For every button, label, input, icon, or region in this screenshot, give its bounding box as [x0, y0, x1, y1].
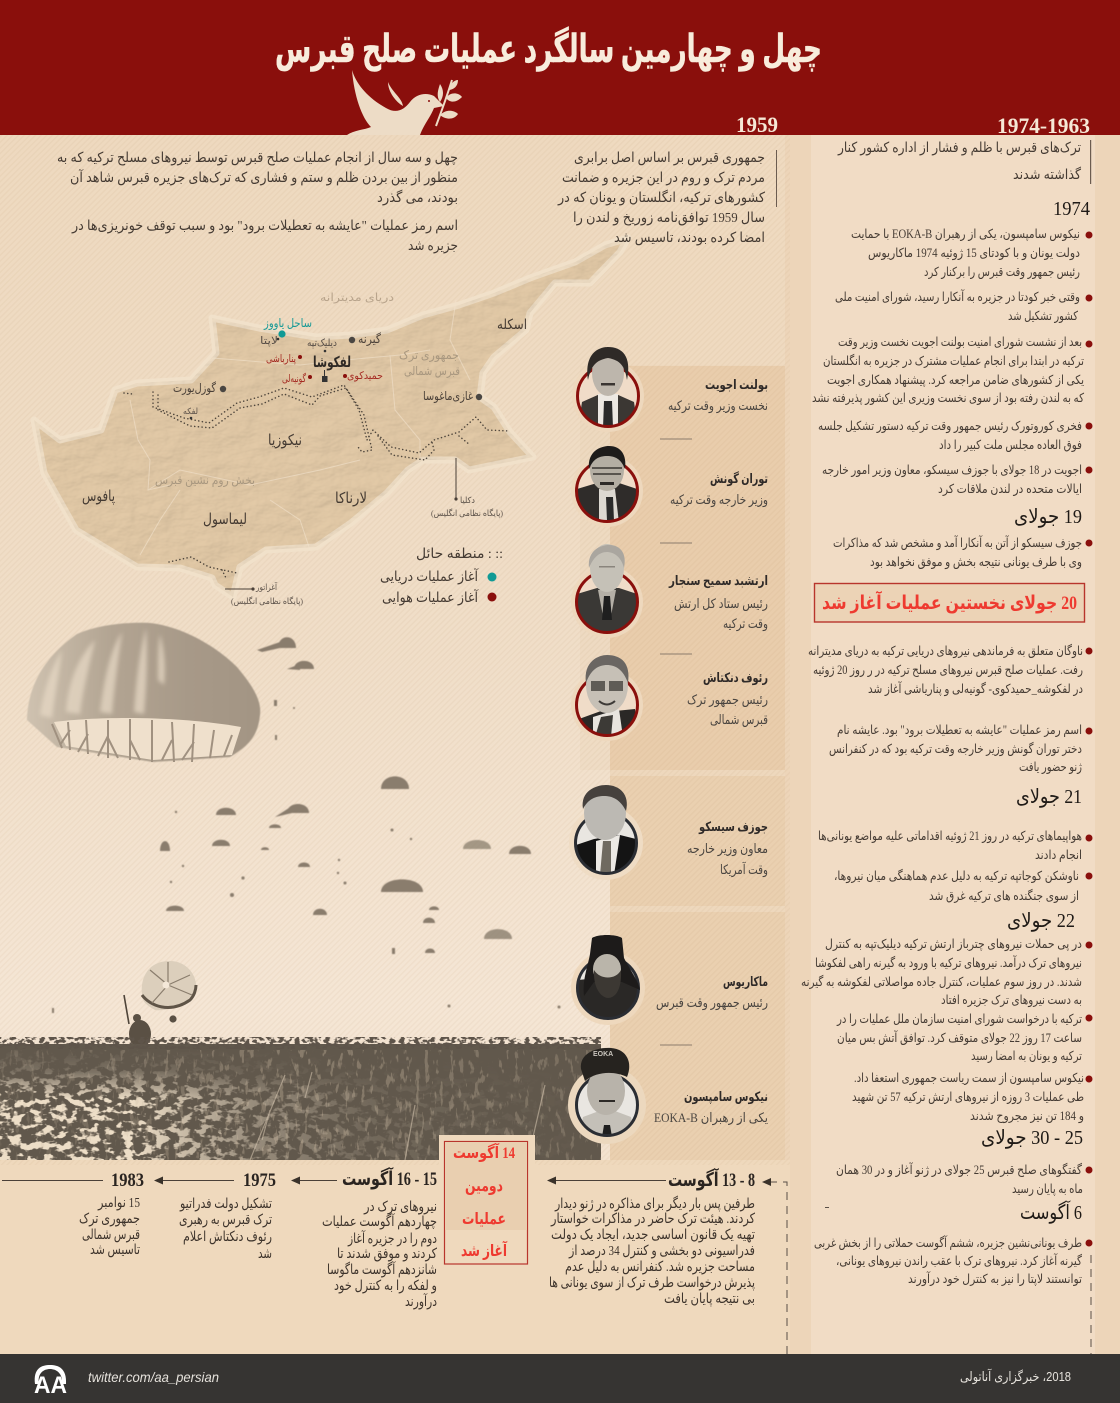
- portrait: Semih Sancar: [571, 544, 643, 638]
- icon: dove with olive branch: [347, 70, 462, 135]
- timeline block 22 July: [801, 937, 1092, 1124]
- timeline: 1983: 1983: [111, 1170, 144, 1191]
- small parachute with soldier: [124, 961, 196, 1048]
- timeline block 25-30 July: گفتگوهای صلح قبرس 25 جولای در ژنو آغاز و در 30 همان: [836, 1162, 1082, 1178]
- map labels: گیرنه: [358, 332, 381, 347]
- timeline: 8-13 August: [547, 1167, 771, 1307]
- text: 1963-1974: [837, 140, 1091, 184]
- heading: 1974-1963: 1974-1963: [997, 113, 1090, 138]
- map labels: دریای مدیترانه: [320, 292, 394, 304]
- portrait: Nikos Sampson: EOKA: [593, 1051, 613, 1058]
- portrait: Nikos Sampson: [568, 1048, 646, 1144]
- map labels: گونیه‌لی: [282, 372, 306, 385]
- buffer zone dotted lines: [124, 385, 509, 578]
- text: Sampson: [654, 1089, 768, 1126]
- legend: آغاز عملیات دریایی: [380, 568, 479, 585]
- timeline block 1974: کشور تشکیل شد: [1008, 309, 1078, 324]
- map labels: پافوس: [82, 489, 115, 506]
- timeline block 22 July: ساعت 17 روز 22 جولای متوقف کرد. توافق آتش بس میان: [837, 1030, 1082, 1046]
- text: Sisco: جوزف سیسکو: [698, 819, 768, 834]
- timeline: 15-16 August: 15 - 16 آگوست: [342, 1166, 437, 1190]
- timeline block 6 August: [814, 1235, 1092, 1287]
- timeline block 19 July: وی با طرف یونانی نتیجه بخش و موفق نخواهد بود: [870, 555, 1082, 570]
- timeline block 21 July: هواپیماهای ترکیه در روز 21 ژوئیه اقداماتی علیه مواضع یونانی‌ها: [818, 829, 1082, 844]
- photo: parachutes: [0, 623, 601, 1160]
- map labels: ساحل یاووز: [263, 316, 312, 331]
- timeline: 15-16 August: [291, 1166, 437, 1310]
- timeline: 1975: تشکیل دولت فدراتیو: [179, 1197, 272, 1212]
- panel: 14 August box: عملیات: [462, 1211, 506, 1228]
- panel: 14 August box: آغاز شد: [461, 1240, 507, 1260]
- map labels: جمهوری ترک: [399, 348, 459, 363]
- timeline: 15-16 August: کردند و موفق شدند تا: [337, 1247, 437, 1262]
- timeline: 8-13 August: طرفین پس بار دیگر برای مذاکره در ژنو دیدار: [554, 1195, 755, 1212]
- map labels: غازی‌ماغوسا: [423, 389, 473, 404]
- timeline: 8-13 August: تهیه یک قانون اساسی جدید، ایجاد یک دولت: [551, 1228, 755, 1243]
- text: Makarios: ماکاریوس: [723, 974, 768, 989]
- timeline block 1974: دولت یونان و با کودتای 15 ژوئیه 1974 ماکاریوس: [868, 246, 1080, 261]
- text: Denktash: [687, 670, 768, 728]
- timeline: 1983: [2, 1170, 144, 1258]
- text: Makarios: [656, 974, 768, 1011]
- timeline block 22 July: و 184 تن نیز مجروح شدند: [970, 1109, 1084, 1124]
- timeline: 15-16 August: نیروهای ترک در: [363, 1199, 437, 1215]
- footer: twitter: twitter.com/aa_persian: [88, 1369, 219, 1385]
- timeline: 8-13 August: پذیرش درخواست طرف ترک از سوی یونانی ها: [549, 1275, 755, 1291]
- timeline block 1974: فوق العاده مجلس ملت کبیر را داد: [939, 438, 1082, 453]
- panel: 14 August box: 14 آگوست: [453, 1142, 515, 1162]
- timeline block 19 July: [833, 535, 1092, 570]
- timeline: 1983: جمهوری ترک: [79, 1211, 140, 1227]
- text: 1959 republic: سال 1959 توافق‌نامه زوریخ و لندن را: [573, 211, 765, 226]
- map labels: حمیدکوی: [347, 371, 383, 382]
- timeline block 22 July: به دست نیروهای ترک جزیره افتاد: [941, 993, 1082, 1008]
- legend: آغاز عملیات هوایی: [382, 589, 479, 606]
- timeline block 20 July: [808, 643, 1092, 775]
- text: Denktash: قبرس شمالی: [710, 712, 768, 728]
- text: Ecevit: نخست وزیر وقت ترکیه: [668, 398, 768, 414]
- timeline: 1975: [154, 1170, 276, 1262]
- portrait: Turan Gunes: [571, 446, 643, 527]
- intro text: منظور از بین بردن ظلم و ستم و فشاری که ترک‌های جزیره قبرس شاهد آن: [70, 169, 458, 186]
- timeline: 8-13 August: کردند. هیئت ترک حاضر در مذاکرات خواستار: [550, 1211, 755, 1227]
- panel: 14 August box: [439, 1135, 535, 1265]
- header band: [0, 0, 1120, 135]
- ground: [0, 1037, 601, 1160]
- timeline: 15-16 August: درآورند: [405, 1293, 437, 1310]
- small parachutes in the sky: [52, 637, 560, 1013]
- map labels: اسکله: [497, 318, 527, 333]
- timeline block 20 July: ژنو حضور یافت: [1019, 760, 1082, 775]
- timeline: 8-13 August: فدراسیونی دو بخشی و کنترل 34 درصد از: [568, 1244, 755, 1259]
- title: چهل و چهارمین سالگرد عملیات صلح قبرس: [275, 26, 822, 72]
- map labels: لارناکا: [335, 491, 367, 507]
- callout: 20 July: 20 جولای نخستین عملیات آغاز شد: [822, 590, 1077, 614]
- timeline block 1974: ایالات متحده در لندن ملاقات کرد: [938, 482, 1082, 497]
- text: 1963-1974: ترک‌های قبرس با ظلم و فشار از اداره کشور کنار: [837, 140, 1081, 156]
- text: 1959 republic: امضا کرده بودند، تاسیس شد: [614, 231, 765, 246]
- panel: 14 August box: دومین: [465, 1178, 503, 1195]
- timeline block 21 July: [818, 829, 1092, 904]
- dashed connector: [770, 1182, 1091, 1354]
- text: Denktash: رئوف دنکتاش: [703, 670, 768, 685]
- text: Gunes: [670, 471, 768, 508]
- icon: AA logo: AA: [34, 1372, 67, 1399]
- text: 1959 republic: مردم ترک و روم در این جزیره و ضمانت: [562, 170, 765, 186]
- heading: 22 July: 22 جولای: [1007, 910, 1075, 932]
- text: Gunes: وزیر خارجه وقت ترکیه: [670, 492, 768, 508]
- timeline: 15-16 August: چهاردهم آگوست عملیات: [322, 1213, 437, 1230]
- timeline block 1974: اجویت در 18 جولای با جوزف سیسکو، معاون وزیر امور خارجه: [822, 463, 1082, 478]
- map labels: لفکوشا: [313, 355, 351, 371]
- text: 1959 republic: کشورهای ترکیه، انگلستان و یونان که در: [557, 189, 765, 206]
- footer band: [0, 1354, 1120, 1403]
- map labels: لاپتا: [260, 336, 278, 347]
- text: Sampson: یکی از رهبران EOKA-B: [654, 1110, 768, 1126]
- intro text: جزیره شد: [408, 239, 458, 254]
- heading: 1959: 1959: [736, 112, 778, 137]
- timeline: 1975: ترک قبرس به رهبری: [179, 1212, 272, 1228]
- text: Ecevit: بولنت اجویت: [705, 377, 768, 392]
- footer: copyright: 2018، خبرگزاری آناتولی: [960, 1368, 1071, 1385]
- timeline: 1983: 15 نوامبر: [97, 1196, 140, 1211]
- text: Gunes: توران گونش: [710, 471, 768, 486]
- map labels: لفکه: [183, 406, 198, 416]
- map labels: دکلیا: [460, 495, 475, 505]
- legend: :: : منطقه حائل: [416, 547, 503, 562]
- text: 1963-1974: گذاشته شدند: [1013, 166, 1081, 183]
- timeline block 21 July: انجام دادند: [1035, 848, 1082, 862]
- heading: 6 August: 6 آگوست: [1020, 1199, 1082, 1224]
- big parachute: [27, 623, 260, 762]
- map of Cyprus: [34, 238, 628, 606]
- portrait: Joseph Sisco: [569, 785, 643, 880]
- text: Sancar: [668, 573, 768, 632]
- map: island shape: [34, 238, 628, 597]
- timeline block 22 July: طی عملیات 3 روزه از نیروهای ارتش ترکیه 57 تن شهید: [852, 1090, 1084, 1105]
- portrait: Rauf Denktash: [571, 655, 643, 741]
- map labels: پنارباشی: [266, 354, 296, 365]
- portrait: Makarios: [571, 935, 645, 1025]
- timeline block 21 July: ناوشکن کوجاتپه ترکیه به دلیل عدم هماهنگی میان نیروها،: [834, 868, 1079, 884]
- timeline block 21 July: از سوی جنگنده های ترکیه غرق شد: [929, 888, 1079, 904]
- timeline block 20 July: در لفکوشه_حمیدکوی- گونیه‌لی و پناریاشی آغاز شد: [868, 681, 1083, 697]
- intro text: بودند، می گذرد: [377, 189, 458, 206]
- map labels: لیماسول: [203, 512, 247, 528]
- timeline block 1974: رئیس جمهور وقت قبرس را برکنار کرد: [924, 265, 1080, 280]
- timeline: 15-16 August: شانزدهم آگوست ماگوسا: [327, 1261, 437, 1278]
- timeline block 25-30 July: ماه به پایان رسید: [1012, 1182, 1083, 1197]
- map labels: قبرس شمالی: [404, 364, 460, 379]
- text: Sancar: وقت ترکیه: [723, 616, 768, 632]
- timeline: 15-16 August: و لفکه را به کنترل خود: [334, 1279, 437, 1294]
- timeline: 1975: رئوف دنکتاش اعلام: [183, 1230, 272, 1245]
- timeline: 8-13 August: مساحت جزیره شد. کنفرانس به دلیل عدم: [565, 1260, 755, 1275]
- text: Sisco: معاون وزیر خارجه: [687, 841, 768, 857]
- timeline: 1983: تاسیس شد: [90, 1243, 140, 1258]
- timeline: 8-13 August: بی نتیجه پایان یافت: [664, 1292, 755, 1307]
- text: Makarios: رئیس جمهور وقت قبرس: [656, 995, 768, 1011]
- text: 1959 republic: [557, 150, 777, 246]
- text: Denktash: رئیس جمهور ترک: [687, 692, 768, 708]
- timeline block 22 July: در پی حملات نیروهای چترباز ارتش ترکیه دیلیک‌تپه به کنترل: [825, 937, 1082, 952]
- text: Sisco: وقت آمریکا: [720, 861, 768, 878]
- timeline block 25-30 July: [836, 1162, 1092, 1197]
- portrait: Bulent Ecevit: [572, 347, 644, 432]
- timeline block 6 August: توانستند لاپتا را نیز به کنترل خود درآورند: [908, 1271, 1082, 1287]
- timeline: 1975: شد: [258, 1247, 272, 1262]
- text: 1959 republic: جمهوری قبرس بر اساس اصل برابری: [574, 151, 765, 166]
- timeline: 1975: 1975: [243, 1170, 276, 1191]
- timeline: 8-13 August: 8 - 13 آگوست: [668, 1167, 755, 1191]
- heading: 19 July: 19 جولای: [1014, 506, 1082, 528]
- timeline block 22 July: ترکیه و یونان به امضا رسید: [971, 1049, 1082, 1064]
- heading: 25-30 July: 25 - 30 جولای: [981, 1127, 1083, 1149]
- map labels: [82, 292, 527, 606]
- intro text: [57, 151, 458, 254]
- heading: 1974: 1974: [1053, 198, 1090, 220]
- text: Sampson: نیکوس سامپسون: [684, 1089, 768, 1104]
- stripes texture: [0, 135, 790, 1165]
- heading: 21 July: 21 جولای: [1016, 786, 1082, 808]
- panel: people background: [580, 366, 785, 1160]
- legend: [380, 547, 503, 606]
- text: Sancar: رئیس ستاد کل ارتش: [674, 596, 768, 612]
- text: Sancar: ارتشبد سمیح سنجار: [668, 573, 768, 588]
- map labels: آغراتور: [255, 581, 278, 592]
- callout: 20 July: [814, 584, 1084, 622]
- map labels: (پایگاه نظامی انگلیس): [431, 508, 503, 518]
- intro text: اسم رمز عملیات "عایشه به تعطیلات برود" بود و سبب توقف خونریزی‌ها در: [71, 219, 458, 234]
- timeline: 1983: قبرس شمالی: [82, 1228, 140, 1243]
- text: Ecevit: [668, 377, 768, 414]
- timeline: 15-16 August: دوم را در جزیره آغاز: [347, 1230, 437, 1247]
- map labels: بخش روم نشین قبرس: [155, 475, 255, 488]
- intro text: چهل و سه سال از انجام عملیات صلح قبرس توسط نیروهای مسلح ترکیه که به: [57, 151, 458, 166]
- map labels: گوزل‌یورت: [173, 381, 216, 396]
- map labels: (پایگاه نظامی انگلیس): [231, 596, 303, 606]
- timeline block 1974: [812, 227, 1092, 497]
- map labels: نیکوزیا: [268, 433, 302, 449]
- timeline block 1974: نیکوس سامپسون، یکی از رهبران EOKA-B با حمایت: [851, 227, 1080, 242]
- map labels: دیلیک‌تپه: [307, 338, 337, 349]
- text: Sisco: [687, 819, 768, 878]
